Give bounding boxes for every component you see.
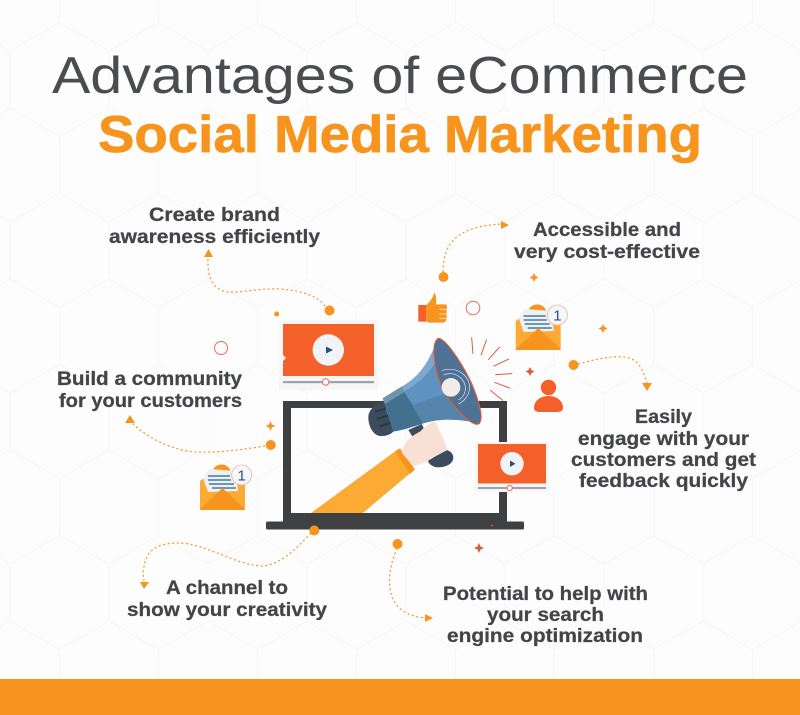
label: brand awareness: Create brand [149, 204, 280, 226]
label: search optimization: your search [487, 604, 604, 626]
arrow: search [390, 539, 433, 622]
label: creativity [127, 577, 327, 621]
label: brand awareness: awareness efficiently [109, 226, 320, 248]
arrow: community [125, 415, 276, 452]
icon: envelope left [200, 464, 252, 510]
label: community: for your customers [59, 390, 242, 412]
arrow: cost-effective [438, 221, 509, 282]
icon: small video player [475, 442, 549, 492]
label: community [57, 368, 242, 412]
speaker cone [442, 378, 460, 397]
label: engage customers [571, 406, 757, 492]
icon: person [534, 380, 563, 412]
laptop [266, 401, 524, 530]
label: community: Build a community [57, 368, 242, 390]
title line 2: Social Media Marketing [98, 106, 702, 164]
label: search optimization: engine optimization [447, 625, 643, 647]
cuff [395, 448, 415, 474]
arm [311, 450, 414, 513]
arrow: engage [568, 357, 652, 391]
icon: envelope right: 1 [553, 308, 562, 324]
label: brand awareness [109, 204, 320, 248]
sound lines [472, 337, 512, 401]
icon: envelope right [516, 304, 567, 350]
back grille [375, 408, 391, 427]
label: engage customers: customers and get [571, 449, 757, 471]
megaphone back [368, 402, 394, 436]
icon: outline circle [466, 301, 480, 315]
label: search optimization: Potential to help with [443, 583, 648, 605]
sound arcs [442, 369, 470, 404]
label: cost-effective [514, 219, 700, 263]
label: engage customers: feedback quickly [579, 470, 748, 492]
megaphone neck [383, 387, 423, 432]
horn shadow [412, 395, 480, 424]
hand [402, 422, 447, 467]
icon: large video player [279, 320, 378, 390]
title [52, 47, 748, 164]
icon: thumbs up [418, 293, 447, 323]
handle [408, 424, 453, 467]
decorative sparks [214, 273, 608, 553]
arrow: creativity [140, 526, 319, 589]
megaphone horn [402, 343, 480, 424]
label: cost-effective: Accessible and [533, 219, 681, 241]
horn highlight [402, 343, 437, 391]
footer bar [0, 679, 800, 715]
neck highlight [383, 387, 405, 404]
label: cost-effective: very cost-effective [514, 241, 700, 263]
label: search optimization [443, 583, 648, 647]
label: creativity: show your creativity [127, 599, 327, 621]
label: engage customers: engage with your [578, 428, 749, 450]
icon: envelope left: 1 [238, 468, 246, 484]
arrow: brand awareness [204, 249, 334, 316]
title line 1: Advantages of eCommerce [52, 47, 748, 105]
label: engage customers: Easily [635, 406, 692, 428]
label: creativity: A channel to [166, 577, 288, 599]
megaphone rim [434, 338, 481, 424]
megaphone and arm illustration [311, 338, 481, 513]
